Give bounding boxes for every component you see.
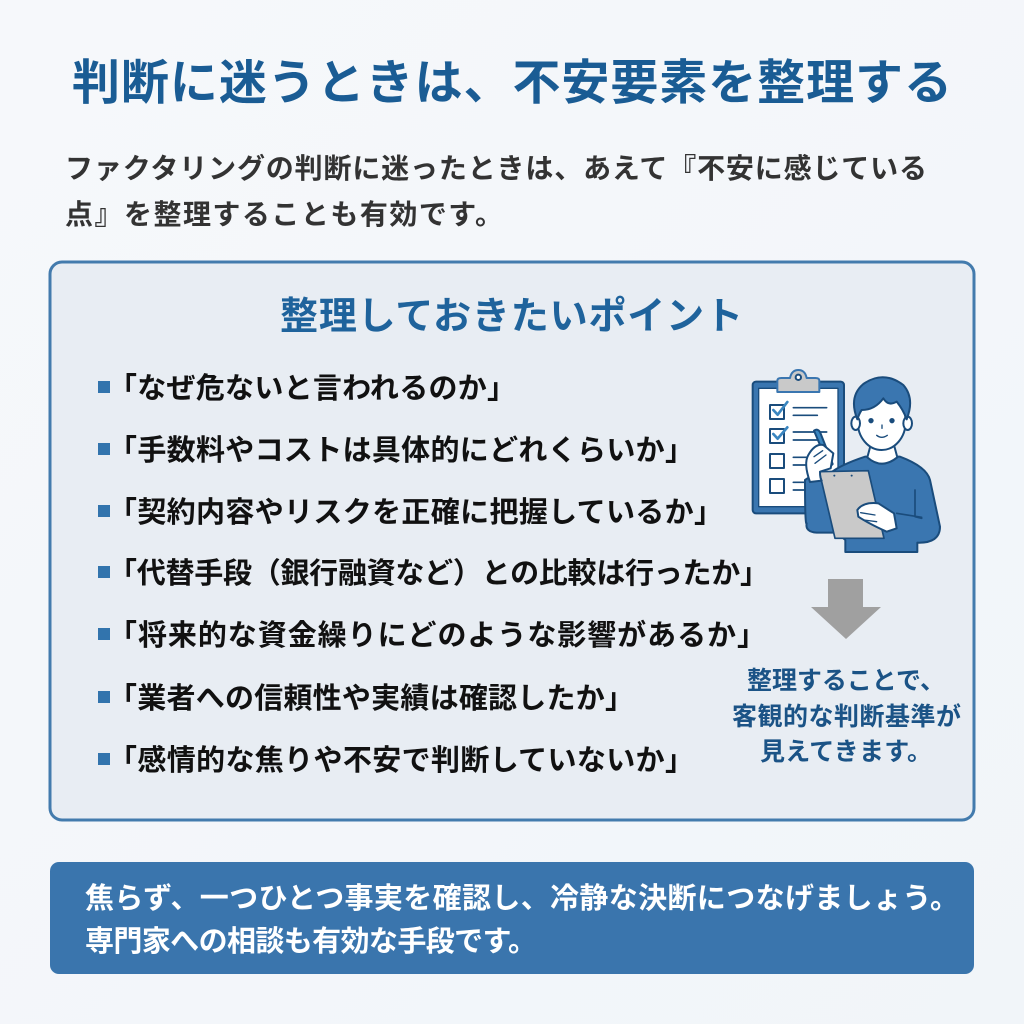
result text: 整理することで、 xyxy=(747,667,945,695)
result text: 客観的な判断基準が xyxy=(732,702,961,731)
checklist xyxy=(98,372,769,777)
checklist: 「手数料やコストは具体的にどれくらいか」 xyxy=(108,434,694,467)
panel heading: 整理しておきたいポイント xyxy=(280,296,743,338)
checklist: 「業者への信頼性や実績は確認したか」 xyxy=(108,682,634,715)
arrow: down xyxy=(811,579,881,639)
footer text: 焦らず、一つひとつ事実を確認し、冷静な決断につなげましょう。 xyxy=(85,882,959,915)
result text: 見えてきます。 xyxy=(760,738,932,766)
intro text: 点』を整理することも有効です。 xyxy=(65,199,503,230)
title: 判断に迷うときは、不安要素を整理する xyxy=(72,57,952,110)
result text xyxy=(732,667,961,766)
footer banner xyxy=(50,862,974,974)
footer text: 専門家への相談も有効な手段です。 xyxy=(85,925,537,958)
checklist: 「感情的な焦りや不安で判断していないか」 xyxy=(108,744,694,777)
footer text xyxy=(85,882,959,958)
panel: points to organize xyxy=(50,262,974,820)
checklist: 「将来的な資金繰りにどのような影響があるか」 xyxy=(108,618,766,652)
checklist: 「代替手段（銀行融資など）との比較は行ったか」 xyxy=(108,557,769,590)
intro text xyxy=(65,152,927,230)
checklist: 「契約内容やリスクを正確に把握しているか」 xyxy=(108,496,723,529)
checklist: 「なぜ危ないと言われるのか」 xyxy=(108,372,516,405)
icon: person with clipboard checklist xyxy=(753,370,940,552)
intro text: ファクタリングの判断に迷ったときは、あえて『不安に感じている xyxy=(65,152,927,184)
